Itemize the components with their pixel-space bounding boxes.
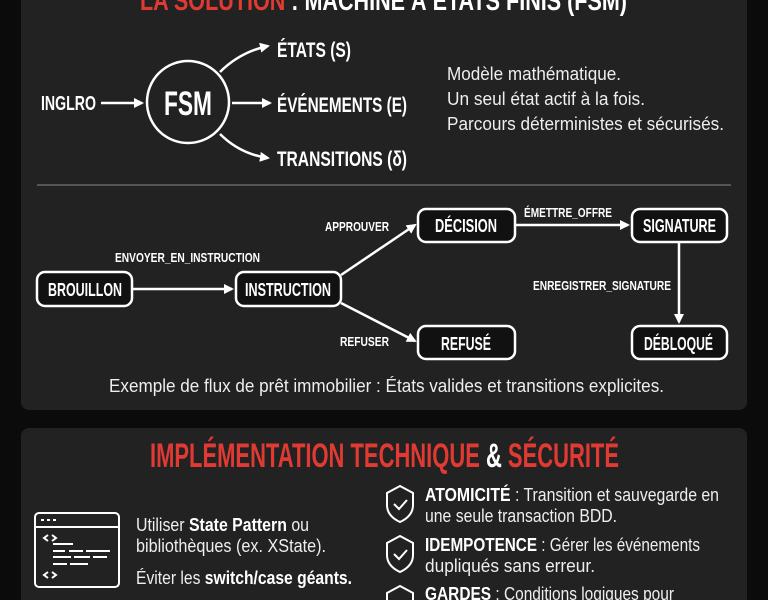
flow diagram: loan: ÉMETTRE_OFFRE: [524, 205, 612, 220]
icon: code window: [35, 513, 119, 587]
caption: Exemple de flux de prêt immobilier : États valides et transitions explicites.: [109, 376, 664, 396]
FSM diagram: ÉVÉNEMENTS (E): [277, 94, 407, 117]
list: security: dupliqués sans erreur.: [425, 556, 595, 576]
list: security: [387, 484, 719, 600]
list: security: ATOMICITÉ : Transition et sauvegarde en: [425, 484, 719, 505]
flow diagram: loan: SIGNATURE: [643, 216, 716, 236]
text: state pattern: bibliothèques (ex. XState).: [136, 536, 326, 556]
flow diagram: loan: [37, 205, 727, 359]
FSM diagram: TRANSITIONS (δ): [277, 148, 407, 171]
text: state pattern: Utiliser State Pattern ou: [136, 515, 309, 535]
FSM diagram: FSM: [164, 85, 212, 123]
flow diagram: loan: ENREGISTRER_SIGNATURE: [533, 278, 671, 293]
FSM diagram: [41, 39, 407, 171]
flow diagram: loan: APPROUVER: [325, 219, 389, 234]
FSM diagram: INGLRO: [41, 93, 96, 115]
flow diagram: loan: BROUILLON: [48, 280, 122, 300]
panel: FSM solution: [21, 0, 747, 410]
text: state pattern: [136, 515, 352, 588]
flow diagram: loan: ENVOYER_EN_INSTRUCTION: [115, 250, 260, 265]
list: security: IDEMPOTENCE : Gérer les événements: [425, 535, 700, 555]
flow diagram: loan: INSTRUCTION: [245, 280, 331, 300]
text: description: Parcours déterministes et sécurisés.: [447, 114, 724, 134]
text: state pattern: Éviter les switch/case géants.: [136, 568, 352, 588]
text: description: Modèle mathématique.: [447, 64, 621, 84]
flow diagram: loan: REFUSÉ: [441, 333, 491, 354]
flow diagram: loan: DÉBLOQUÉ: [644, 333, 713, 354]
text: description: [447, 64, 724, 134]
FSM diagram: ÉTATS (S): [277, 39, 351, 62]
panel: implementation: [21, 428, 747, 600]
flow diagram: loan: DÉCISION: [435, 215, 497, 236]
flow diagram: loan: REFUSER: [340, 334, 389, 349]
list: security: une seule transaction BDD.: [425, 506, 617, 526]
text: description: Un seul état actif à la fois.: [447, 89, 645, 109]
heading: IMPLÉMENTATION TECHNIQUE & SÉCURITÉ: [150, 437, 619, 475]
